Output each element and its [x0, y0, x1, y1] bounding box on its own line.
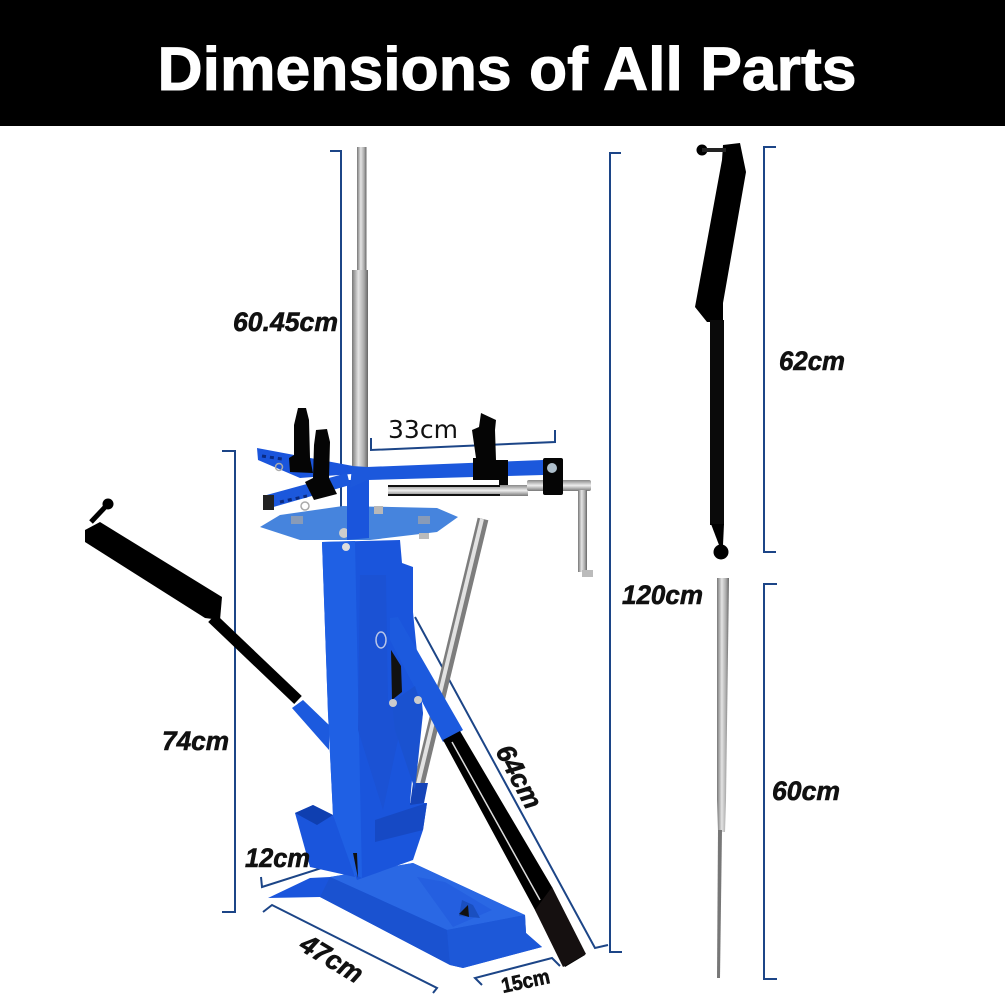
removed silver rod part [717, 578, 729, 978]
arm sleeve [389, 617, 463, 790]
label 120cm: 120cm [622, 580, 703, 610]
label 74cm: 74cm [162, 726, 229, 756]
tire changer machine [85, 147, 593, 968]
steel base [268, 863, 542, 968]
label 15cm: 15cm [499, 965, 552, 998]
label 60.45cm: 60.45cm [233, 307, 338, 337]
black clamp jaws [289, 408, 508, 500]
removed lever part [695, 143, 746, 560]
title banner [0, 0, 1005, 126]
rod socket [410, 783, 428, 805]
label 60cm: 60cm [772, 776, 840, 806]
side socket tube [295, 805, 355, 877]
cross arms [257, 448, 543, 540]
octagonal plate [260, 506, 458, 551]
label 62cm: 62cm [779, 346, 845, 376]
blue column [322, 540, 427, 880]
foot pedal [375, 803, 427, 842]
dimension lines [222, 147, 777, 993]
left lever [85, 498, 329, 750]
labels [162, 307, 845, 998]
label 64cm: 64cm [490, 740, 548, 814]
bead breaker silver rod [418, 519, 483, 784]
black handle [443, 731, 586, 967]
silver slide rod and T-handle [388, 458, 593, 577]
label 47cm: 47cm [294, 928, 369, 989]
label 12cm: 12cm [245, 843, 310, 873]
silver centre pole [352, 147, 368, 470]
label 33cm: 33cm [388, 415, 458, 444]
title banner: Dimensions of All Parts [158, 35, 856, 103]
